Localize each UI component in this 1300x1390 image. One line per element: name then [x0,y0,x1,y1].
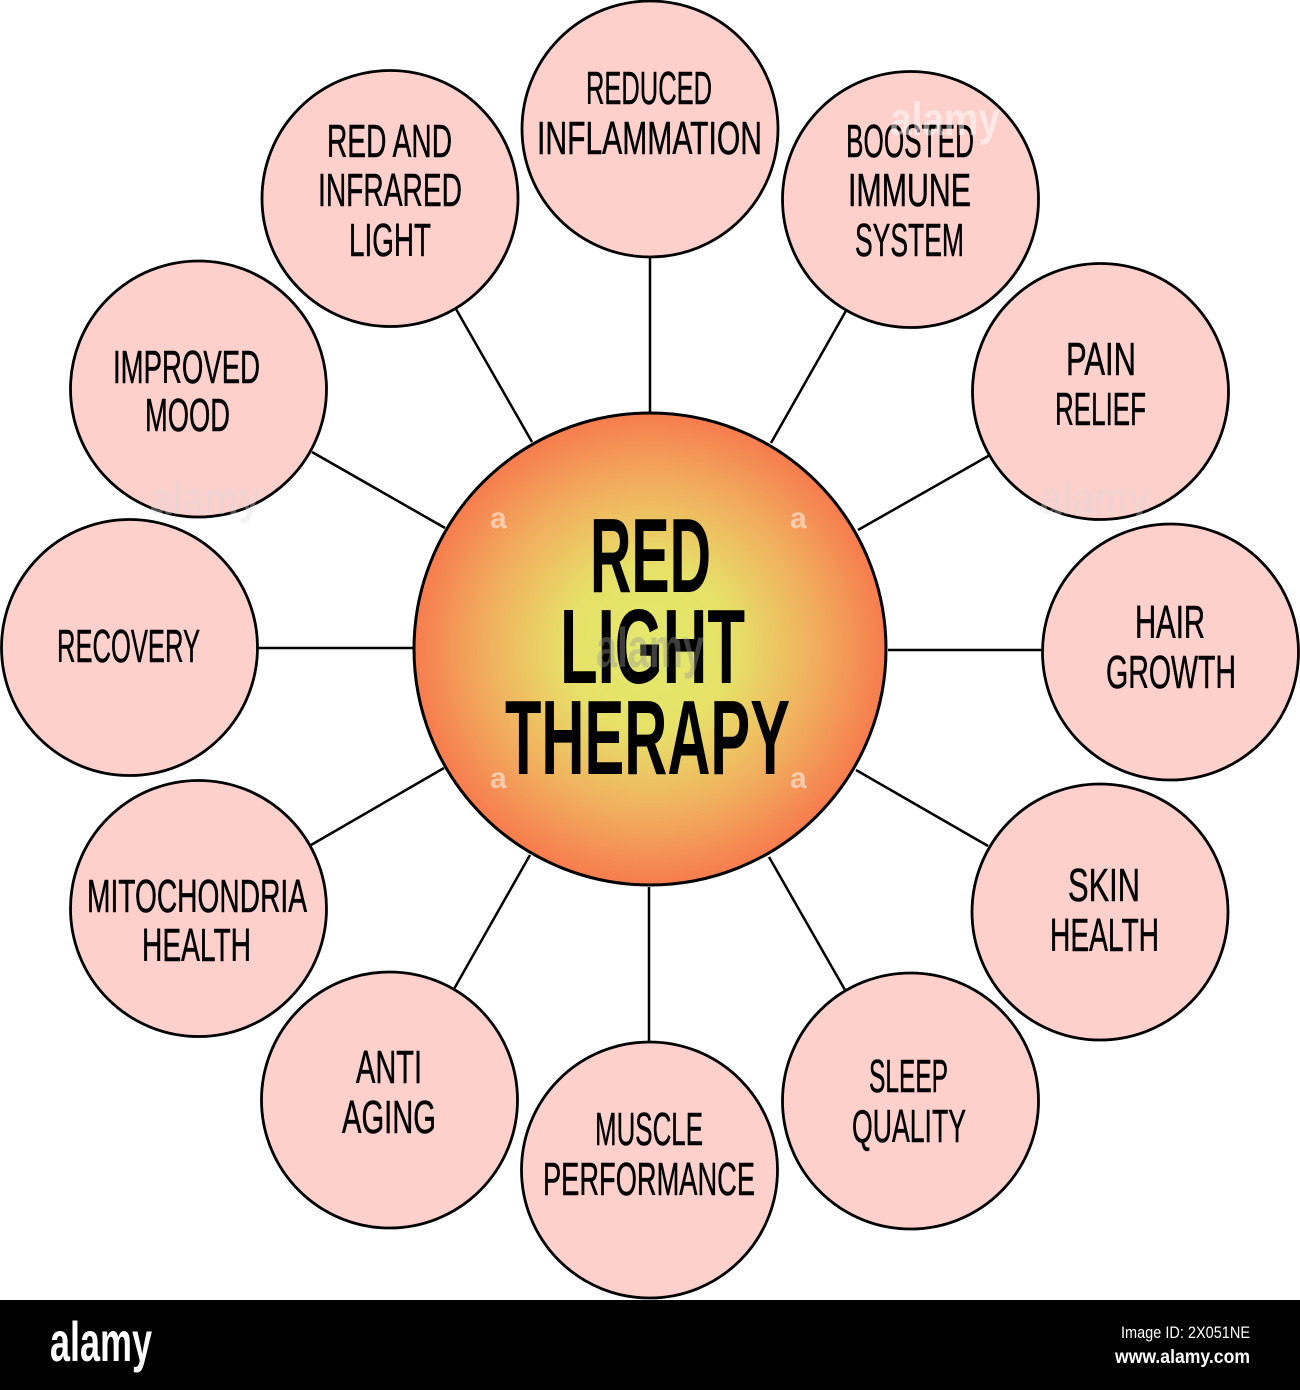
benefit: anti aging: AGING [342,1091,436,1143]
watermark marks: alamy [1040,472,1150,524]
center hub: red light therapy: THERAPY [505,679,790,797]
benefit: mitochondria health: MITOCHONDRIA [87,870,307,922]
benefit: anti aging: ANTI [356,1041,422,1093]
benefit: muscle performance [522,1042,778,1298]
benefit: red and infrared light [262,70,518,326]
bottom stock photo bar [0,1300,1300,1390]
benefit: boosted immune system [782,72,1038,328]
benefit: anti aging [262,972,518,1228]
benefit: boosted immune system: IMMUNE [848,164,971,216]
benefit: skin health: HEALTH [1050,909,1159,961]
watermark marks: a [790,762,807,795]
benefit: improved mood: IMPROVED [113,341,260,393]
center hub: red light therapy [414,413,886,885]
watermark marks: a [490,762,507,795]
benefit: recovery: RECOVERY [57,620,200,672]
watermark marks: alamy [150,472,260,524]
benefit: improved mood [70,261,326,517]
benefit: sleep quality: SLEEP [869,1050,948,1102]
benefit: sleep quality [782,973,1038,1229]
benefit: red and infrared light: INFRARED [318,164,462,216]
benefit: muscle performance: PERFORMANCE [543,1153,755,1205]
benefit: recovery [2,520,258,776]
benefit: reduced inflammation [522,1,778,257]
benefit: red and infrared light: LIGHT [349,214,431,266]
benefit: skin health: SKIN [1068,859,1140,911]
bottom stock photo bar: www.alamy.com [1114,1347,1250,1368]
benefit: reduced inflammation: INFLAMMATION [537,112,762,164]
bottom stock photo bar: alamy [50,1310,152,1373]
benefit: skin health [972,784,1228,1040]
connector lines [258,258,1043,1043]
benefit: sleep quality: QUALITY [852,1100,966,1152]
benefit: muscle performance: MUSCLE [595,1103,703,1155]
benefit: hair growth: HAIR [1135,596,1205,648]
benefit: mitochondria health [70,780,326,1036]
benefit: boosted immune system: BOOSTED [846,115,974,167]
watermark marks: a [490,502,507,535]
benefit: hair growth [1042,524,1298,780]
benefit: pain relief: RELIEF [1055,383,1146,435]
benefit: reduced inflammation: REDUCED [586,62,712,114]
benefit: mitochondria health: HEALTH [142,919,251,971]
center hub: red light therapy: LIGHT [560,588,745,706]
benefit: improved mood: MOOD [145,389,230,441]
benefit: pain relief [972,264,1228,520]
benefit: red and infrared light: RED AND [327,115,452,167]
watermark marks: a [790,502,807,535]
watermark marks [150,93,1150,795]
bottom stock photo bar: Image ID: 2X051NE [1121,1323,1250,1342]
watermark marks: alamy [890,93,1000,145]
center hub: red light therapy: RED [590,497,711,615]
benefit: boosted immune system: SYSTEM [855,214,964,266]
watermark marks: alamy [596,616,704,679]
benefit: pain relief: PAIN [1066,333,1136,385]
